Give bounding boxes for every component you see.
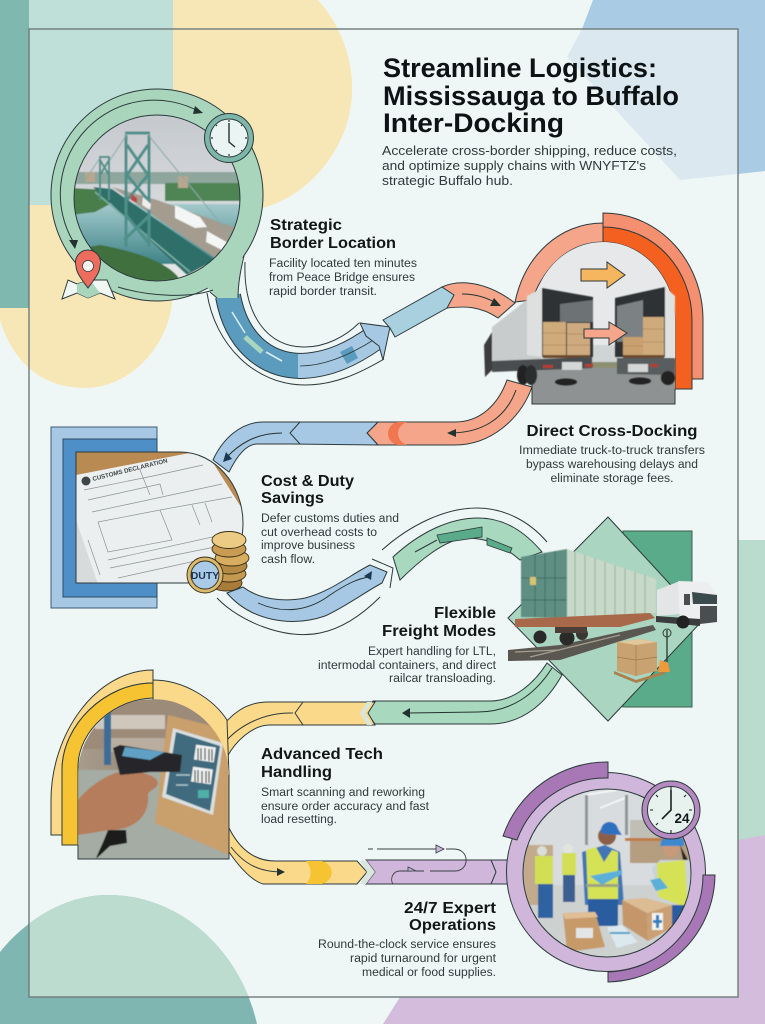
ribbon: yellow return xyxy=(218,702,375,757)
title: Streamline Logistics: xyxy=(383,53,657,83)
icon: 24 clock xyxy=(642,781,700,839)
worker back xyxy=(562,844,576,902)
bridge photo xyxy=(70,115,245,285)
right truck xyxy=(615,287,675,385)
heading and text: cost and duty savings: Savings xyxy=(261,490,324,507)
ribbon: salmon return xyxy=(367,380,532,445)
subtitle: and optimize supply chains with WNYFTZ's xyxy=(382,158,646,173)
icon: 24 clock: 24 xyxy=(674,811,690,826)
heading and text: cost and duty savings: Cost & Duty xyxy=(261,473,354,490)
trucks photo xyxy=(530,240,680,405)
title: Inter-Docking xyxy=(383,108,564,138)
heading and text: advanced tech handling xyxy=(261,746,430,826)
heading and text: flexible freight modes: Expert handling for LTL, xyxy=(368,646,496,658)
ribbon: green to freight xyxy=(382,508,547,580)
arch bands xyxy=(51,670,229,845)
heading and text: flexible freight modes xyxy=(318,605,497,685)
icon: clock xyxy=(204,114,254,162)
panel: 24/7 operations image xyxy=(503,762,715,982)
boxes xyxy=(563,898,672,952)
panel: cost and duty savings image xyxy=(51,427,249,608)
heading and text: advanced tech handling: ensure order accuracy and fast xyxy=(261,801,430,813)
heading and text: 24/7 expert operations: 24/7 Expert xyxy=(404,900,497,917)
heading and text: advanced tech handling: Advanced Tech xyxy=(261,746,383,763)
rail track xyxy=(508,625,656,661)
ribbon: blue return xyxy=(213,422,378,472)
heading and text: cost and duty savings: cut overhead costs to xyxy=(261,527,377,539)
semi truck xyxy=(656,581,718,628)
heading and text: strategic border location xyxy=(269,217,417,298)
pallet with boxes xyxy=(614,629,671,683)
heading and text: strategic border location: Border Location xyxy=(270,235,396,252)
ribbon: blue to freight xyxy=(217,559,393,635)
worker centre xyxy=(582,822,624,926)
heading and text: advanced tech handling: Handling xyxy=(261,764,332,781)
icon: coins and duty badge xyxy=(187,532,249,593)
subtitle: strategic Buffalo hub. xyxy=(382,173,513,188)
heading and text: flexible freight modes: railcar transloading. xyxy=(389,673,496,685)
ring xyxy=(503,762,715,982)
worker far left xyxy=(535,846,553,918)
heading and text: 24/7 expert operations: rapid turnaround for urgent xyxy=(350,953,497,965)
worker right xyxy=(650,838,690,926)
heading and text: cost and duty savings: improve business xyxy=(261,540,355,552)
scanner photo xyxy=(78,699,230,861)
container xyxy=(521,549,656,618)
customs document photo xyxy=(76,452,241,582)
panel: strategic border location image xyxy=(51,89,263,301)
ribbon: purple entry xyxy=(360,845,510,884)
left truck xyxy=(484,288,593,386)
subtitle xyxy=(382,143,677,188)
heading and text: advanced tech handling: Smart scanning and reworking xyxy=(261,787,425,799)
heading and text: cost and duty savings xyxy=(261,473,399,566)
heading and text: flexible freight modes: Flexible xyxy=(434,605,496,622)
icon: coins and duty badge: DUTY xyxy=(191,570,219,582)
heading and text: cost and duty savings: cash flow. xyxy=(261,554,315,566)
heading and text: cost and duty savings: Defer customs duties and xyxy=(261,513,399,525)
icon: map pin xyxy=(62,250,115,299)
warehouse crew photo xyxy=(520,787,695,960)
heading and text: flexible freight modes: Freight Modes xyxy=(382,623,496,640)
ring xyxy=(51,89,263,301)
heading and text: 24/7 expert operations: medical or food supplies. xyxy=(362,967,496,979)
heading and text: strategic border location: rapid border transit. xyxy=(269,286,377,298)
arrow: yellow xyxy=(581,262,625,288)
heading and text: direct cross-docking: eliminate storage fees. xyxy=(550,473,674,485)
title: Mississauga to Buffalo xyxy=(383,81,679,111)
panel: direct cross-docking image xyxy=(484,213,703,405)
arc bands xyxy=(515,213,703,389)
heading and text: strategic border location: Strategic xyxy=(270,217,342,234)
panel: advanced tech handling image xyxy=(51,670,230,861)
subtitle: Accelerate cross-border shipping, reduce costs, xyxy=(382,143,677,158)
document label: CUSTOMS DECLARATION xyxy=(92,457,169,483)
step 1: ribbon to cross-docking xyxy=(207,262,390,385)
heading and text: direct cross-docking: bypass warehousing delays and xyxy=(526,459,698,471)
heading and text: direct cross-docking xyxy=(519,423,705,485)
ribbon: blue to salmon into cross-docking xyxy=(383,283,515,337)
heading and text: direct cross-docking: Direct Cross-Docking xyxy=(526,423,698,440)
heading and text: 24/7 expert operations: Operations xyxy=(409,917,496,934)
panel: flexible freight modes image xyxy=(508,517,718,721)
heading and text: flexible freight modes: intermodal containers, and direct xyxy=(318,660,497,672)
heading and text: 24/7 expert operations xyxy=(318,900,497,979)
heading and text: advanced tech handling: load resetting. xyxy=(261,814,337,826)
railcar xyxy=(515,613,655,646)
ribbon: yellow lower xyxy=(229,828,367,884)
title xyxy=(383,53,679,138)
heading and text: direct cross-docking: Immediate truck-to-truck transfers xyxy=(519,445,705,457)
heading and text: strategic border location: Facility located ten minutes xyxy=(269,258,417,270)
heading and text: 24/7 expert operations: Round-the-clock service ensures xyxy=(318,939,496,951)
ribbon: green return xyxy=(367,663,562,724)
heading and text: strategic border location: from Peace Bridge ensures xyxy=(269,272,415,284)
arrow: salmon xyxy=(584,322,627,345)
